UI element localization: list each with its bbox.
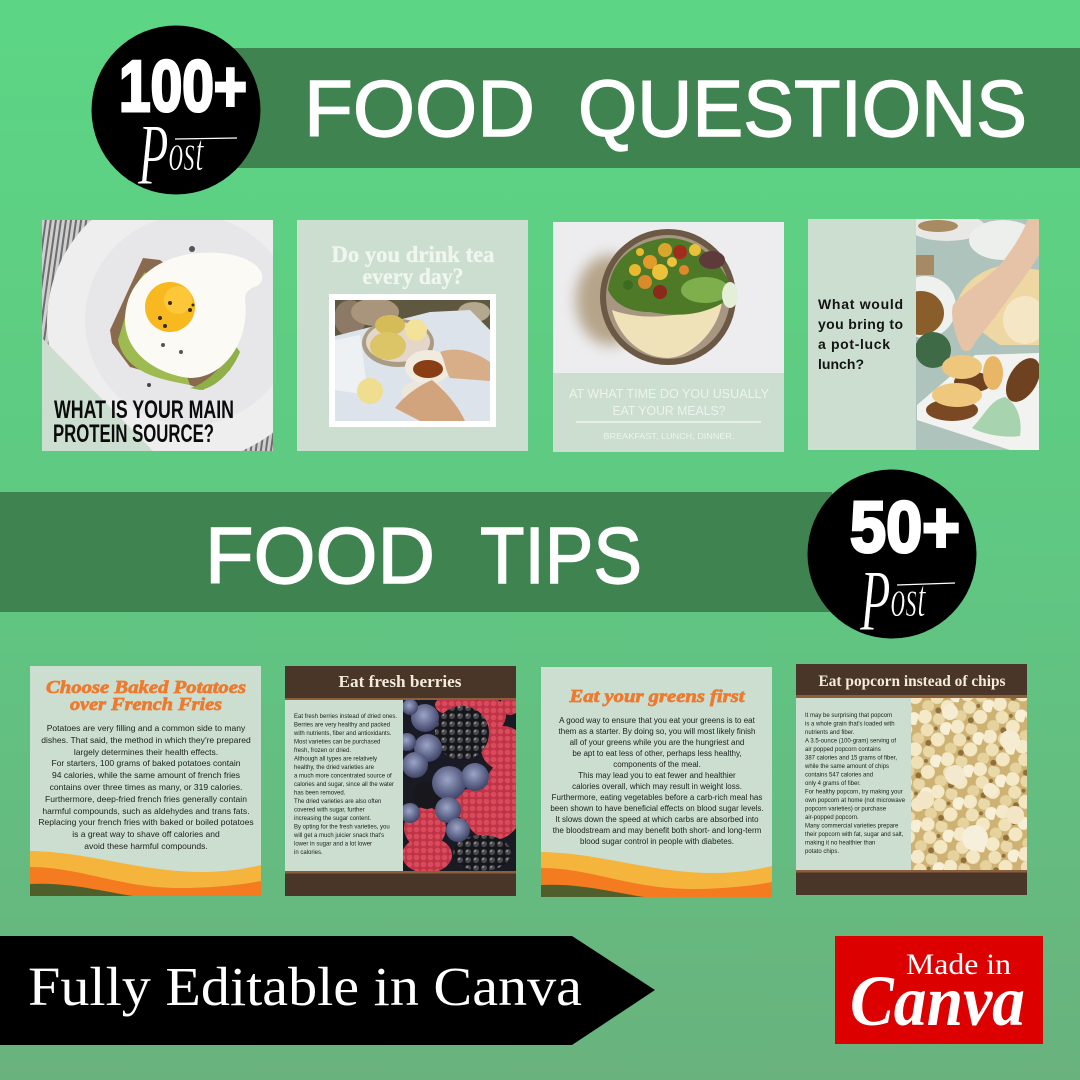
- tip body text: calories and sugar, since all the water: [294, 782, 394, 788]
- tip body text: nutrients and fiber.: [805, 730, 855, 736]
- question text: [818, 296, 903, 372]
- question text: What would: [818, 296, 903, 312]
- tip body text: harmful compounds, such as aldehydes and trans fats.: [42, 806, 250, 816]
- tip title: Eat your greens first: [568, 686, 746, 706]
- question text: a pot-luck: [818, 336, 890, 352]
- tip body text: The dried varieties are also often: [294, 799, 381, 805]
- badge: 100+ post: [92, 26, 260, 204]
- tip title: Eat fresh berries: [338, 672, 462, 691]
- badge: 100+ post: ost: [169, 125, 204, 182]
- tip body text: Berries are very healthy and packed: [294, 722, 390, 728]
- tip title: Eat popcorn instead of chips: [818, 673, 1006, 690]
- badge: 100+ post: P: [137, 107, 169, 204]
- question text: lunch?: [818, 356, 864, 372]
- tip body text: fresh, frozen or dried.: [294, 748, 351, 754]
- tip title: over French Fries: [70, 694, 222, 714]
- tip body text: It slows down the speed at which carbs are absorbed into: [555, 815, 759, 824]
- tip body text: components of the meal.: [613, 760, 701, 769]
- tip body text: Potatoes are very filling and a common side to many: [47, 723, 246, 733]
- tip body text: For healthy popcorn, try making your: [805, 790, 903, 796]
- badge: 50+ post: [808, 470, 976, 650]
- badge: 50+ post: 50+: [850, 488, 960, 568]
- question text: you bring to: [818, 316, 903, 332]
- tip body text: will get a much juicier snack that's: [293, 833, 384, 839]
- tip body text: lower in sugar and a lot lower: [294, 842, 372, 848]
- badge: 50+ post: P: [859, 553, 891, 650]
- heading: food tips: FOOD: [205, 511, 435, 600]
- question text: PROTEIN SOURCE?: [53, 420, 214, 448]
- tip body text: This may lead you to eat fewer and healthier: [578, 771, 736, 780]
- bowl photo: [553, 222, 784, 373]
- question text: every day?: [362, 264, 464, 289]
- tip body text: making it no healthier than: [805, 840, 875, 846]
- tip body text: popcorn varieties) or purchase: [805, 806, 887, 812]
- card: tea question: [297, 220, 528, 451]
- tip body text: Many commercial varieties prepare: [805, 824, 899, 830]
- food photo: [916, 219, 1039, 450]
- question text: WHAT IS YOUR MAIN: [54, 396, 234, 424]
- tip body text: healthy, the dried varieties are: [294, 765, 375, 771]
- tip body text: covered with sugar, further: [294, 808, 365, 814]
- tip body text: them as a starter. By doing so, you will most likely finish: [559, 727, 755, 736]
- tip body text: [804, 713, 906, 855]
- badge: 100+ post: 100+: [119, 47, 247, 127]
- tip card: fresh berries: [285, 666, 527, 896]
- made in canva badge: Made in: [906, 948, 1011, 981]
- tip body text: a much more concentrated source of: [294, 774, 392, 780]
- heading: food tips: [205, 511, 642, 600]
- tip body text: while the same amount of chips: [804, 764, 889, 770]
- tip body text: is a great way to shave off calories and: [72, 829, 220, 839]
- tip body text: the bloodstream and may benefit both short- and long-term: [553, 826, 762, 835]
- tip body text: 387 calories and 15 grams of fiber,: [805, 756, 897, 762]
- tip body text: A 3.5-ounce (100-gram) serving of: [805, 738, 896, 744]
- card: pot-luck question: [808, 213, 1047, 450]
- tip body text: largely determines their health effects.: [74, 747, 218, 757]
- made in canva badge: [835, 936, 1043, 1044]
- tip body text: with nutrients, fiber and antioxidants.: [293, 731, 392, 737]
- question text: [53, 396, 234, 448]
- badge: 50+ post: ost: [891, 571, 926, 628]
- tip body text: [550, 716, 764, 846]
- question text: [332, 242, 495, 289]
- berries photo: [403, 700, 516, 871]
- tip body text: It may be surprising that popcorn: [805, 713, 892, 719]
- header banner: food tips: [0, 492, 832, 612]
- tip body text: Although all types are relatively: [294, 756, 377, 762]
- call to action arrow: [0, 936, 655, 1045]
- tip card: greens first: [541, 667, 772, 897]
- tip body text: is a whole grain that's loaded with: [805, 722, 895, 728]
- tip body text: 94 calories, while the same amount of french fries: [52, 770, 240, 780]
- heading: food questions: QUESTIONS: [578, 64, 1027, 153]
- tip body text: calories overall, which may result in weight loss.: [572, 782, 742, 791]
- tip body text: Furthermore, eating vegetables before a carb-rich meal has: [552, 793, 762, 802]
- card: meal time question: [553, 222, 784, 452]
- popcorn photo: [911, 698, 1027, 870]
- tip body text: dishes. That said, the method in which they're prepared: [41, 735, 251, 745]
- tip body text: contains over three times as many, or 319 calories.: [50, 782, 242, 792]
- heading: food tips: TIPS: [480, 511, 642, 600]
- answer text: BREAKFAST, LUNCH, DINNER.: [604, 431, 734, 441]
- heading: food questions: FOOD: [304, 64, 535, 153]
- card: meal time question: EAT YOUR MEALS?: [612, 403, 726, 418]
- call to action arrow: Fully Editable in Canva: [28, 956, 582, 1017]
- tip title: Choose Baked Potatoes: [46, 677, 246, 697]
- tea photo: [329, 294, 496, 427]
- tip body text: increasing the sugar content.: [294, 816, 371, 822]
- tip body text: avoid these harmful compounds.: [84, 841, 208, 851]
- tip body text: Most varieties can be purchased: [294, 740, 380, 746]
- tip body text: air-popped popcorn.: [805, 815, 859, 821]
- decorative waves: [30, 851, 261, 896]
- tip body text: their popcorn with fat, sugar and salt,: [805, 832, 904, 838]
- tip body text: has been removed.: [294, 790, 346, 796]
- decorative waves: [541, 852, 772, 897]
- tip body text: Eat fresh berries instead of dried ones.: [294, 714, 397, 720]
- tip body text: air popped popcorn contains: [805, 747, 881, 753]
- made in canva badge: Canva: [850, 961, 1025, 1041]
- tip body text: potato chips.: [805, 849, 839, 855]
- tip card: popcorn: [796, 664, 1027, 895]
- tip body text: contains 547 calories and: [805, 772, 873, 778]
- tip body text: A good way to ensure that you eat your greens is to eat: [559, 716, 756, 725]
- tip body text: By opting for the fresh varieties, you: [294, 824, 390, 830]
- tip body text: Furthermore, deep-fried french fries generally contain: [45, 794, 247, 804]
- tip title: [46, 677, 246, 714]
- tip body text: be apt to eat less of other, perhaps less healthy,: [572, 749, 742, 758]
- card: protein question: [42, 220, 273, 451]
- tip body text: blood sugar control in people with diabetes.: [580, 837, 734, 846]
- tip body text: in calories.: [294, 850, 323, 856]
- tip card: baked potatoes: [30, 666, 261, 896]
- tip body text: [293, 714, 397, 856]
- header banner: food questions: [225, 48, 1080, 168]
- tip body text: [38, 723, 254, 851]
- tip body text: been shown to have beneficial effects on blood sugar levels.: [550, 804, 764, 813]
- tip body text: For starters, 100 grams of baked potatoes contain: [51, 758, 241, 768]
- tip body text: only 4 grams of fiber.: [805, 781, 861, 787]
- tip body text: own popcorn at home (not microwave: [805, 798, 906, 804]
- tip body text: all of your greens while you are the hungriest and: [570, 738, 744, 747]
- question text: Do you drink tea: [332, 242, 495, 267]
- question text: AT WHAT TIME DO YOU USUALLY: [569, 386, 769, 401]
- tip body text: Replacing your french fries with baked or boiled potatoes: [38, 817, 254, 827]
- heading: food questions: [304, 64, 1027, 153]
